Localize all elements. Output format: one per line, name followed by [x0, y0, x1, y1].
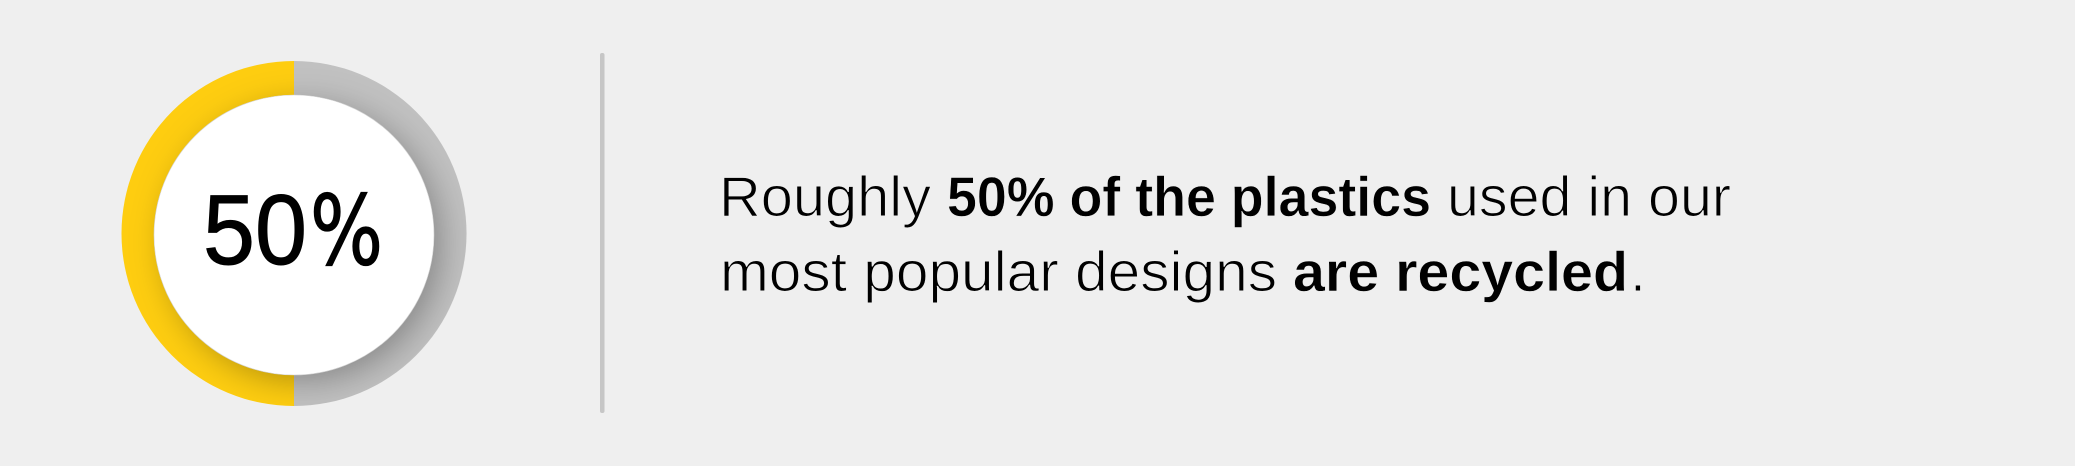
- inner white disc: [154, 95, 434, 375]
- center value: %: [310, 175, 383, 287]
- donut chart: 50%: [122, 61, 467, 406]
- line 2: .: [1630, 240, 1646, 304]
- description text: [719, 165, 1731, 304]
- center value: 50: [203, 174, 307, 285]
- inner disc shadow: [165, 105, 441, 381]
- center value: [203, 174, 383, 287]
- line 2: are recycled: [1293, 240, 1628, 303]
- line 1: Roughly: [719, 165, 931, 229]
- ring segment: remaining share (grey): [294, 61, 466, 406]
- line 1: [719, 165, 1731, 229]
- line 2: [720, 240, 1646, 304]
- line 1: 50% of the plastics: [947, 165, 1431, 228]
- vertical divider: [600, 53, 604, 413]
- line 1: used in our: [1447, 165, 1731, 229]
- line 2: most popular designs: [720, 240, 1277, 304]
- ring segment: recycled share (yellow): [122, 61, 294, 406]
